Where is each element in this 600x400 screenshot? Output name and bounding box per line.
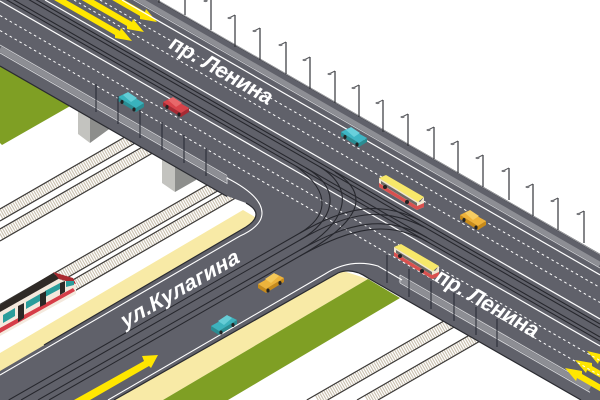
lower guard rail: east section <box>400 275 590 392</box>
street name: lower prospekt: пр. Ленина <box>430 264 546 342</box>
lamp posts: lower side, west <box>96 84 206 176</box>
bus: upper <box>379 175 424 210</box>
yellow arrows: north-west carriageway <box>15 0 157 41</box>
van: yellow <box>460 210 486 230</box>
car: red <box>163 97 189 117</box>
lower guard rail: west section <box>0 45 227 184</box>
sand strip: upper side of ul. Kulagina <box>0 210 260 376</box>
car: teal, upper carriageway <box>341 127 367 147</box>
lamp posts: lower side, east <box>387 255 497 347</box>
bridge pier 2 <box>162 150 196 192</box>
car: teal on ul. Kulagina <box>211 315 237 335</box>
green lawn: upper left <box>0 64 72 145</box>
street lamps: upper side <box>152 0 584 243</box>
street name: upper prospekt: пр. Ленина <box>164 31 280 109</box>
car: teal, west section <box>118 92 144 112</box>
upper guard rail <box>125 0 600 268</box>
yellow arrows: south-east carriageway <box>565 351 600 391</box>
metro train <box>0 272 76 336</box>
sand strip: lower side of ul. Kulagina <box>112 270 368 400</box>
tram tracks: ul. Kulagina with junction curves <box>9 166 427 400</box>
yellow arrow: ul. Kulagina <box>74 355 158 400</box>
bridge pier 1 <box>78 100 112 143</box>
street name: ul. Kulagina: ул.Кулагина <box>119 242 242 334</box>
rail tracks: upper left <box>0 117 170 241</box>
bus: lower <box>394 244 439 279</box>
green lawn: lower <box>163 279 400 400</box>
rail tracks: lower right <box>307 289 520 400</box>
rail tracks: centre <box>0 154 280 334</box>
car: orange van on ul. Kulagina <box>258 273 284 293</box>
